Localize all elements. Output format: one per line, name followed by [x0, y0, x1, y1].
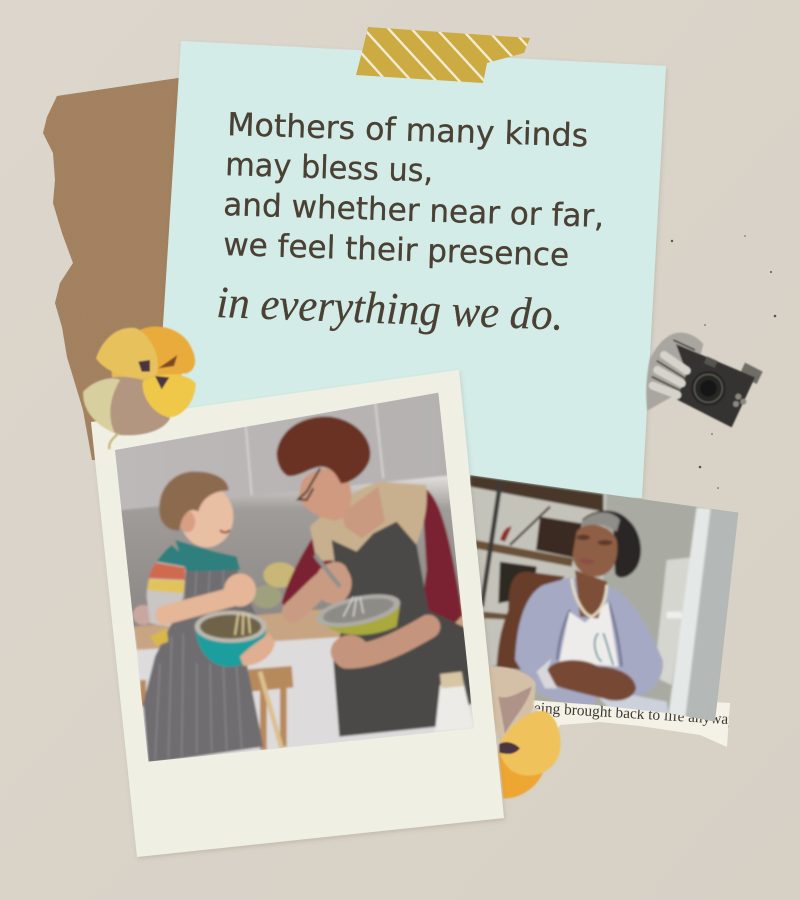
backsplash	[117, 475, 467, 630]
quote line 1: Mothers of many kinds	[227, 107, 589, 154]
mint note paper	[150, 41, 666, 498]
polaroid frame	[91, 370, 504, 857]
face	[573, 525, 617, 577]
icon: pressed flower, bottom	[489, 667, 561, 798]
stem	[109, 433, 118, 449]
clasped hands	[547, 660, 636, 701]
neck	[575, 570, 607, 618]
white top	[559, 602, 618, 667]
photo: grandmother and boy baking	[110, 390, 477, 770]
yellow petal	[499, 711, 561, 776]
white column	[668, 507, 711, 721]
strip text: being brought back to life anyway	[526, 699, 737, 728]
flower centre	[499, 742, 520, 754]
quote line 3: and whether near or far,	[223, 187, 605, 235]
hair	[582, 511, 641, 578]
woman: lower arm	[347, 627, 428, 657]
milk bottle	[435, 682, 474, 732]
quote line 2: may bless us,	[225, 147, 434, 190]
leather chair	[497, 572, 565, 670]
woman: face	[299, 469, 351, 521]
boy: hand on bowl	[240, 633, 275, 666]
quote line 4: we feel their presence	[223, 227, 570, 274]
woman: bowl	[314, 555, 403, 635]
photo: older woman at desk	[470, 470, 743, 730]
orange petal	[498, 750, 544, 798]
room wall	[470, 470, 743, 730]
woman: forearm and hand	[293, 573, 337, 612]
door	[654, 557, 692, 685]
necklace	[572, 578, 607, 617]
washi tape: gold stripes	[356, 27, 530, 83]
woman: cardigan	[310, 482, 427, 562]
counter fruit	[133, 562, 297, 625]
notebook	[598, 694, 668, 715]
woman: neck and chest	[342, 487, 385, 538]
torn book page strip	[533, 700, 730, 747]
cardigan	[515, 577, 663, 707]
camera body	[676, 344, 755, 427]
woman: glasses	[298, 468, 320, 500]
boy: apron	[143, 560, 263, 763]
flower centres	[138, 355, 177, 389]
paper specks	[671, 235, 776, 489]
torn brown paper	[43, 78, 200, 460]
counter	[133, 600, 467, 650]
boy: collar	[175, 540, 240, 572]
kitchen cabinets	[110, 390, 453, 512]
boy: face	[180, 486, 233, 547]
wooden chair	[140, 666, 293, 750]
woman: red sleeves	[422, 489, 462, 624]
mauve lower petal	[83, 377, 170, 435]
lower cabinets	[137, 636, 474, 755]
boy: bare arm	[165, 597, 233, 615]
camera flash	[739, 363, 763, 384]
hand	[646, 333, 703, 411]
cuff	[537, 658, 557, 688]
camera lens	[691, 371, 726, 406]
quote text	[216, 107, 605, 340]
top left yellow petal	[96, 328, 161, 378]
top right orange petal	[140, 326, 195, 375]
woman: apron	[332, 522, 472, 737]
fingers	[653, 355, 687, 395]
boy: cuff	[150, 628, 168, 646]
icon: pressed flower, top	[83, 326, 196, 449]
boy: hair	[159, 472, 228, 531]
boy: sweater sleeve	[147, 545, 186, 627]
flower base filling gaps	[112, 345, 182, 402]
lower right yellow petal	[143, 374, 196, 417]
mauve upper petal	[489, 667, 536, 757]
italic closing line: in everything we do.	[216, 277, 564, 340]
bookshelves	[470, 475, 603, 619]
boy: bowl	[195, 611, 267, 667]
icon: hand holding camera	[646, 333, 763, 427]
woman: hair	[277, 417, 370, 483]
